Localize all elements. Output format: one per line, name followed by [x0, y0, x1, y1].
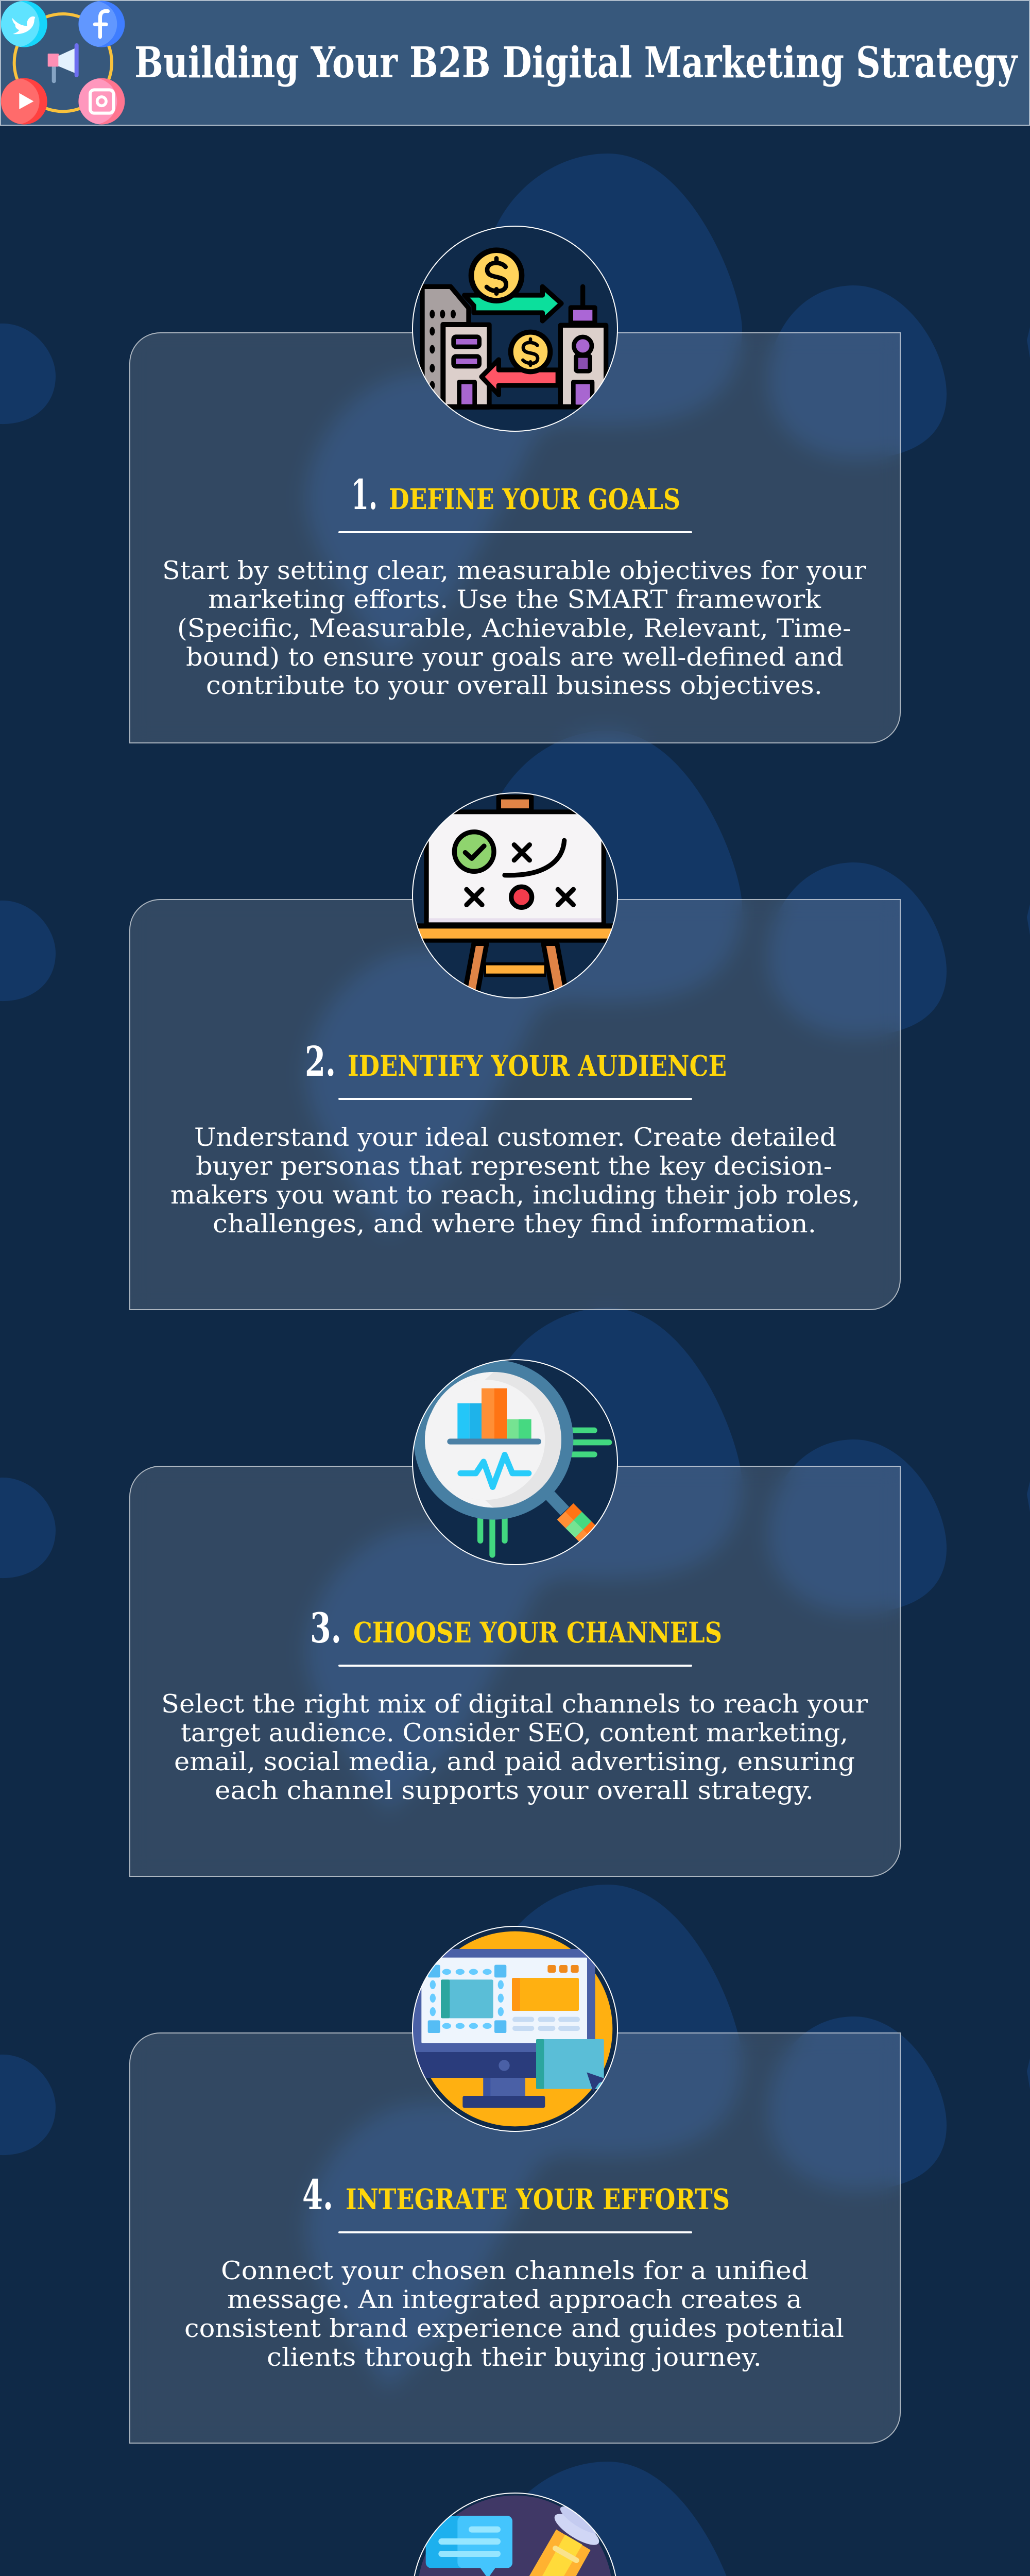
step 1 text: marketing efforts. Use the SMART framework: [208, 585, 821, 614]
panel: step 1 define your goals: [129, 332, 901, 743]
step 2 text: 2.: [305, 1037, 336, 1086]
icon: magnifier over bar chart: [412, 1359, 618, 1565]
step 3 text: 3.: [310, 1604, 341, 1652]
step 1 text: 1.: [351, 470, 377, 519]
step 4 text: [184, 2171, 844, 2372]
step 3 text: target audience. Consider SEO, content marketing,: [181, 1718, 848, 1748]
step 3 text: each channel supports your overall strategy.: [215, 1776, 814, 1805]
step 2 text: buyer personas that represent the key decision-: [196, 1151, 832, 1181]
icon: strategy board on easel: [412, 792, 618, 998]
icon: monitor with layout: [412, 1926, 618, 2132]
step 4 text: consistent brand experience and guides potential: [184, 2314, 844, 2343]
step 4 text: Connect your chosen channels for a unified: [221, 2256, 809, 2285]
header banner: [0, 0, 1030, 126]
step 1 text: DEFINE YOUR GOALS: [389, 482, 680, 516]
step 2 text: [170, 1037, 860, 1239]
step 2 text: IDENTIFY YOUR AUDIENCE: [348, 1049, 727, 1082]
panel: step 3 choose your channels: [129, 1466, 901, 1877]
step 4 text: 4.: [302, 2171, 333, 2219]
step 1 text: [162, 470, 867, 700]
icon: buildings exchanging money: [412, 226, 618, 432]
panel: step 4 integrate your efforts: [129, 2032, 901, 2444]
step 1 text: contribute to your overall business objectives.: [206, 671, 822, 700]
step 4 text: INTEGRATE YOUR EFFORTS: [346, 2182, 730, 2216]
step 2 text: challenges, and where they find information.: [213, 1209, 816, 1239]
step 4 text: clients through their buying journey.: [267, 2343, 762, 2372]
icon: social media ring with megaphone: [1, 1, 125, 125]
icon: pencil and speech bubbles: [414, 2493, 616, 2576]
step 1 text: Start by setting clear, measurable objectives for your: [162, 556, 867, 585]
step 3 text: [161, 1604, 868, 1805]
step 4 text: message. An integrated approach creates a: [227, 2285, 802, 2314]
step 3 text: Select the right mix of digital channels to reach your: [161, 1689, 868, 1719]
step 2 text: makers you want to reach, including their job roles,: [170, 1180, 860, 1210]
step 1 text: (Specific, Measurable, Achievable, Relevant, Time-: [177, 614, 851, 643]
step 1 text: bound) to ensure your goals are well-defined and: [186, 642, 844, 672]
step 3 text: email, social media, and paid advertising, ensuring: [174, 1747, 855, 1776]
panel: step 2 identify your audience: [129, 899, 901, 1310]
step 2 text: Understand your ideal customer. Create detailed: [194, 1123, 836, 1152]
step 3 text: CHOOSE YOUR CHANNELS: [353, 1616, 722, 1649]
